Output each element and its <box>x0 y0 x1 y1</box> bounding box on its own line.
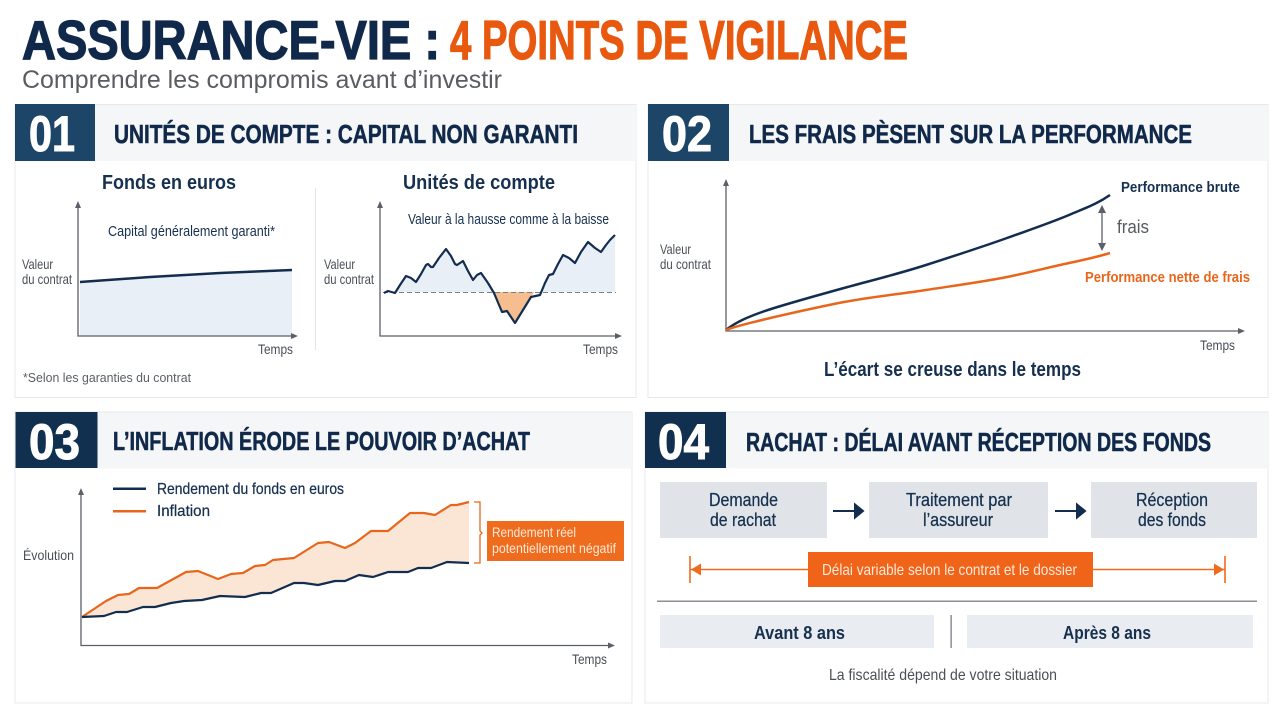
delay span arrow: Délai variable selon le contrat et le dossier <box>822 562 1078 579</box>
number badge 04: 04 <box>658 414 709 470</box>
number badge 03 <box>16 412 98 470</box>
step: réception <box>1091 482 1257 538</box>
callout: rendement réel <box>487 521 624 561</box>
arrow: step 1 to 2 <box>833 504 863 518</box>
chart: performance brute et nette: Valeur <box>660 241 691 257</box>
legend: Rendement du fonds en euros <box>157 481 344 498</box>
callout: rendement réel: Rendement réel <box>492 524 576 540</box>
legend: Inflation <box>157 503 210 520</box>
legend <box>113 481 344 520</box>
chart: fonds en euros: Temps <box>258 341 293 357</box>
panel: 03 inflation <box>15 412 632 703</box>
tab: après 8 ans <box>967 615 1253 648</box>
step: demande de rachat: de rachat <box>710 510 776 530</box>
callout: rendement réel: potentiellement négatif <box>492 540 616 556</box>
caption 02: L’écart se creuse dans le temps <box>824 359 1081 381</box>
chart: rendement vs inflation: Évolution <box>23 547 74 563</box>
footnote: *Selon les garanties du contrat <box>23 370 191 385</box>
delay span arrow <box>690 552 1225 587</box>
chart: unités de compte: Valeur à la hausse comme à la baisse <box>408 211 609 228</box>
panel: 02 frais <box>648 104 1268 398</box>
note fiscalité: La fiscalité dépend de votre situation <box>829 667 1057 684</box>
chart: unités de compte: Valeur <box>324 256 355 272</box>
panel: 04 rachat <box>645 412 1268 703</box>
panel: 01 unités de compte <box>15 104 636 398</box>
chart: unités de compte: du contrat <box>324 271 374 287</box>
chart: fonds en euros <box>22 172 298 357</box>
chart: unités de compte: Temps <box>583 341 618 357</box>
brace <box>474 502 482 563</box>
number badge 04 <box>645 412 726 470</box>
step: traitement: Traitement par <box>906 490 1012 510</box>
number badge 02: 02 <box>662 106 712 162</box>
number badge 01 <box>15 104 95 162</box>
chart: performance brute et nette: frais <box>1117 217 1149 237</box>
subtitle: Comprendre les compromis avant d’investir <box>22 66 502 94</box>
number badge 01: 01 <box>29 106 75 162</box>
step: demande de rachat: Demande <box>709 490 778 510</box>
chart: rendement vs inflation: Temps <box>572 651 607 667</box>
title <box>22 9 908 71</box>
chart: fonds en euros: Valeur <box>22 256 53 272</box>
chart: performance brute et nette: Performance brute <box>1121 179 1240 196</box>
chart: fonds en euros: Capital généralement garanti* <box>108 223 275 240</box>
tab: après 8 ans: Après 8 ans <box>1063 623 1151 643</box>
chart: fonds en euros: du contrat <box>22 271 72 287</box>
step: traitement: l’assureur <box>923 510 993 530</box>
chart: performance brute et nette: du contrat <box>660 256 711 272</box>
arrow: step 2 to 3 <box>1055 504 1085 518</box>
title: ASSURANCE-VIE : <box>22 9 440 71</box>
step: réception: Réception <box>1136 490 1208 510</box>
tab: avant 8 ans <box>660 615 934 648</box>
title: 4 POINTS DE VIGILANCE <box>450 9 908 71</box>
number badge 02 <box>648 104 729 162</box>
number badge 03: 03 <box>29 414 80 470</box>
chart: rendement vs inflation <box>23 488 615 667</box>
step: demande de rachat <box>660 482 827 538</box>
chart: performance brute et nette: Temps <box>1200 337 1235 353</box>
arrow: frais gap <box>1098 205 1106 251</box>
chart: unités de compte: Unités de compte <box>403 172 555 194</box>
chart: unités de compte <box>324 172 622 357</box>
chart: fonds en euros: Fonds en euros <box>102 172 236 194</box>
heading 03: L’INFLATION ÉRODE LE POUVOIR D’ACHAT <box>113 426 530 456</box>
step: réception: des fonds <box>1138 510 1206 530</box>
heading 01: UNITÉS DE COMPTE : CAPITAL NON GARANTI <box>114 119 578 149</box>
chart: performance brute et nette: Performance nette de frais <box>1085 269 1250 286</box>
step: traitement <box>869 482 1048 538</box>
chart: performance brute et nette <box>660 179 1250 353</box>
tab: avant 8 ans: Avant 8 ans <box>754 623 845 643</box>
